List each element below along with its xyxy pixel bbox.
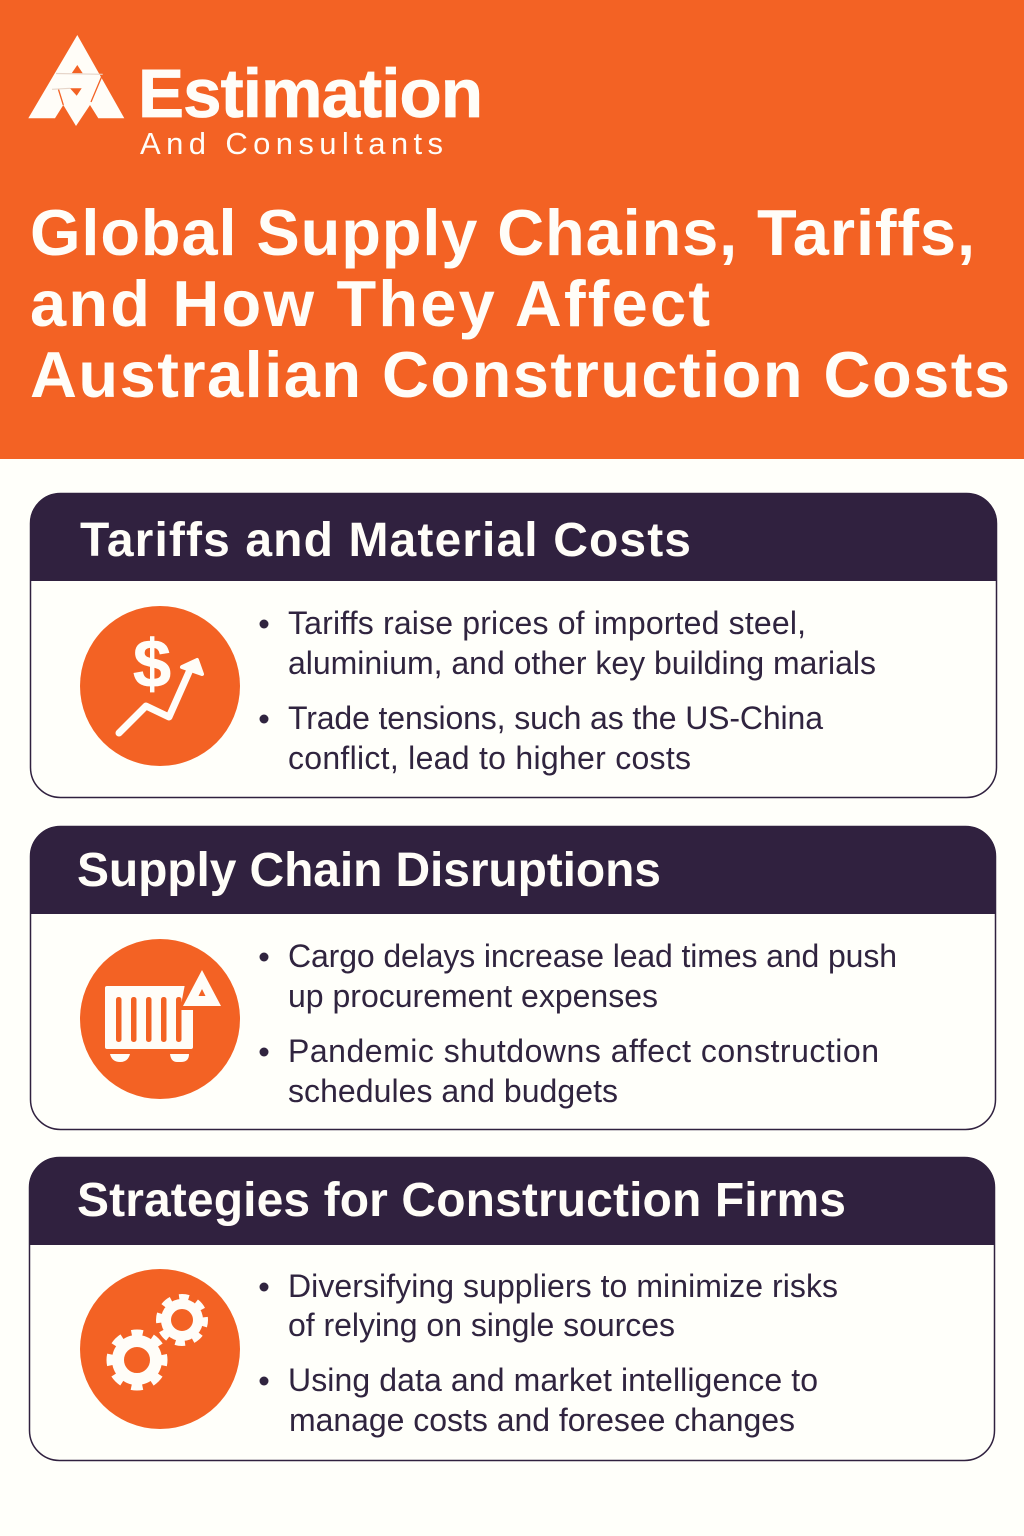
title: Global Supply Chains, Tariffs, — [30, 196, 975, 269]
bullet list: Tariffs raise prices of imported steel, — [288, 605, 806, 641]
bullet list: Using data and market intelligence to — [288, 1362, 818, 1398]
bullet list: conflict, lead to higher costs — [288, 740, 691, 776]
title: Australian Construction Costs — [30, 338, 1010, 411]
bullet list: Trade tensions, such as the US-China — [288, 700, 823, 736]
panel header bar — [29, 1157, 995, 1245]
bullet list: schedules and budgets — [288, 1073, 618, 1109]
header banner — [0, 0, 1024, 459]
bullet list: of relying on single sources — [288, 1307, 675, 1343]
wordmark: Estimation — [138, 55, 483, 132]
card outline — [30, 1158, 994, 1460]
bullet list: up procurement expenses — [288, 978, 658, 1014]
title — [30, 196, 1010, 411]
icon: dollar with rising arrow: $ — [133, 626, 171, 702]
logo — [28, 35, 483, 161]
bullet list: Diversifying suppliers to minimize risks — [288, 1268, 838, 1304]
bullet list — [260, 1268, 838, 1438]
panel heading: Supply Chain Disruptions — [77, 844, 661, 897]
panel: strategies for construction firms — [29, 1157, 995, 1460]
card outline — [30, 494, 996, 798]
bullet list — [260, 938, 897, 1109]
bullet list: Cargo delays increase lead times and push — [288, 938, 897, 974]
icon: logo triangle mark — [28, 35, 124, 126]
icon: shipping container with warning triangle — [80, 939, 240, 1099]
bullet list: Pandemic shutdowns affect construction — [288, 1033, 879, 1069]
card outline — [30, 826, 996, 1130]
bullet list: aluminium, and other key building marials — [288, 645, 876, 681]
panel heading: Strategies for Construction Firms — [77, 1174, 846, 1227]
panel: tariffs and material costs — [30, 493, 997, 798]
panel header bar — [30, 493, 997, 581]
panel heading: Tariffs and Material Costs — [80, 514, 691, 567]
panel: supply chain disruptions — [30, 826, 996, 1130]
bullet list — [260, 605, 876, 776]
title: and How They Affect — [30, 267, 710, 340]
icon: dollar with rising arrow — [80, 606, 240, 766]
bullet list: manage costs and foresee changes — [289, 1402, 795, 1438]
tagline: And Consultants — [140, 126, 443, 161]
icon: gears — [80, 1269, 240, 1429]
panel header bar — [30, 826, 996, 914]
